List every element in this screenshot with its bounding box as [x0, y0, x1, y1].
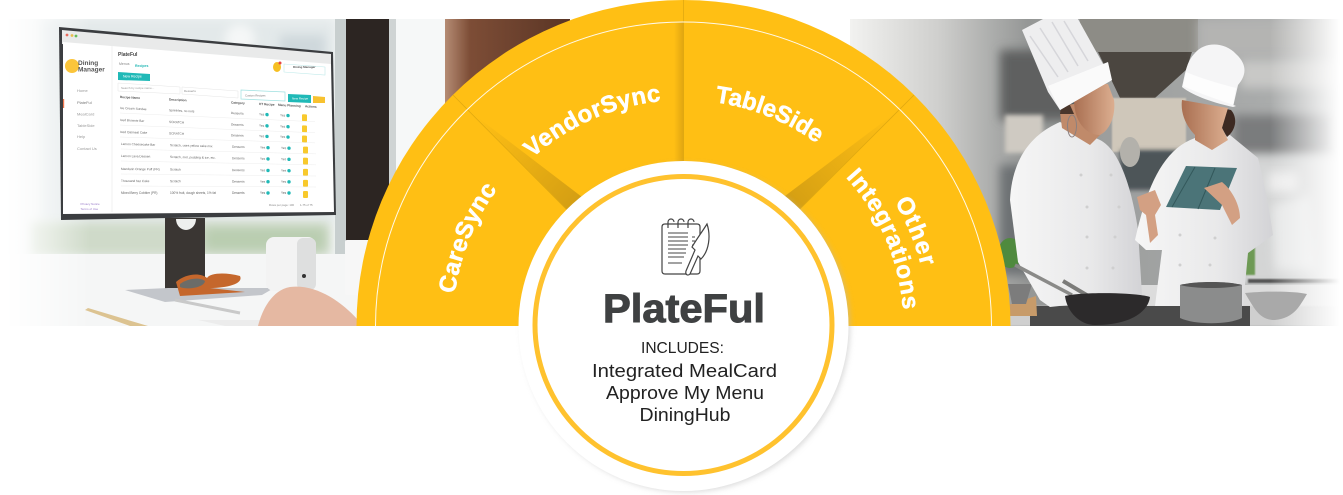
includes list: Approve My Menu [606, 383, 764, 403]
screen: sidebar menu: PlateFul [77, 100, 92, 105]
divider shadows [453, 0, 914, 210]
fan labels: Other [898, 197, 934, 264]
pans and pots [1015, 265, 1307, 325]
photo: chefs in a commercial kitchen [850, 19, 1343, 326]
screen: recipe table: SCRATCH [169, 120, 185, 125]
fan labels: TableSide [717, 86, 822, 142]
screen: recipe table: 1-75 of 75 [300, 203, 313, 207]
chef left [1010, 19, 1142, 307]
icon: notepad and chef knife [662, 219, 709, 275]
screen: recipe table: SCRATCH [169, 131, 185, 136]
screen: page header and buttons: PlateFul [118, 52, 138, 58]
chef right [1135, 44, 1273, 306]
includes list: INCLUDES: [641, 340, 724, 357]
desk items: glasses, device, keyboard, hand [175, 237, 358, 326]
screen: recipe table: Desserts [231, 111, 244, 116]
includes list: Integrated MealCard [592, 361, 777, 381]
screen: recipe table: Mixed Berry Cobbler (PR) [121, 191, 158, 195]
screen: dining manager logo: Dining [78, 60, 98, 67]
fan labels: VendorSync [521, 88, 660, 154]
screen: page header and buttons: Search by recipe name... [121, 86, 155, 90]
screen: recipe table: Thousand Nut Cake [121, 179, 150, 183]
screen: recipe table: Iced Oatmeal Cake [120, 130, 148, 135]
includes list [592, 340, 777, 425]
screen: recipe table: Desserts [232, 180, 245, 184]
screen: recipe table: Yes [281, 146, 287, 150]
heading: PlateFul [603, 287, 765, 331]
screen: recipe table: Yes [259, 124, 265, 128]
screen: recipe table: Yes [260, 145, 266, 150]
screen: recipe table: Yes [260, 180, 266, 184]
screen: recipe table: Iced Brownie Bar [120, 118, 145, 123]
photo: office desk with monitor [30, 19, 389, 326]
screen: recipe table: Scratch, mol. pudding & ice, etc. [170, 155, 216, 160]
screen: recipe table: Actions [305, 104, 317, 109]
screen: recipe table: Yes [280, 124, 286, 129]
screen: recipe table: Yes [260, 191, 266, 195]
screen: recipe table: Yes [281, 157, 287, 161]
screen: recipe table: Yes [281, 191, 287, 195]
screen: recipe table: Yes [281, 169, 287, 173]
screen: page header and buttons: Desserts [184, 89, 196, 93]
screen: sidebar menu: TableSide [77, 123, 95, 128]
screen: recipe table: Desserts [232, 156, 245, 160]
screen: recipe table: Scratch, uses yellow cake mix [170, 143, 213, 148]
screen: recipe table: Yes [260, 157, 266, 161]
screen: recipe table: Desserts [232, 191, 245, 195]
screen: page header and buttons: Menus [119, 62, 130, 66]
screen: recipe table: Yes [280, 113, 286, 117]
screen: recipe table: 100% fruit, dough sheets, 1% fat [170, 191, 216, 195]
yellow fan [356, 0, 1010, 326]
screen: recipe table: Yes [259, 134, 265, 138]
screen: recipe table: Menu Planning [278, 103, 301, 108]
screen: recipe table: Rows per page: 100 [269, 203, 294, 207]
plant and board on the counter [998, 238, 1037, 316]
screen: recipe table: Desserts [232, 168, 245, 172]
screen: recipe table: Yes [280, 135, 286, 139]
screen: sidebar menu: Privacy Notice [80, 202, 100, 206]
screen: recipe table: Mandarin Orange Puff (PR) [121, 167, 160, 171]
screen: dining manager logo [65, 59, 105, 74]
screen: recipe table: Sprinkles, no nuts [169, 108, 195, 113]
screen: recipe table: Lemon Cheesecake Bar [121, 142, 156, 147]
screen: page header and buttons: New Recipe [292, 96, 309, 100]
screen: recipe table: Desserts [231, 122, 244, 127]
screen: sidebar menu: Home [77, 88, 88, 93]
fan labels [439, 86, 934, 309]
screen: page header and buttons: Recipes [135, 64, 148, 68]
screen: page header and buttons [118, 52, 325, 103]
screen: recipe table: Description [169, 97, 187, 102]
screen: recipe table: Scratch [170, 179, 181, 183]
screen: recipe table: Recipe Name [120, 95, 140, 100]
screen: recipe table: Scratch [170, 167, 181, 172]
screen: recipe table: Desserts [232, 145, 245, 149]
screen: recipe table: Category [231, 101, 245, 105]
screen: page header and buttons: Custom Recipes [245, 94, 266, 98]
thin white arc [376, 22, 992, 326]
screen: sidebar menu: MealCard [77, 112, 94, 116]
window and hair behind the fan [389, 19, 570, 259]
screen: recipe table: Yes [281, 180, 287, 184]
screen: sidebar menu: Help [77, 134, 86, 139]
screen: page header and buttons: Dining Manager [293, 65, 316, 69]
monitor [59, 27, 336, 302]
screen: recipe table: Ice Cream Sundae [120, 106, 147, 111]
screen: page header and buttons: New Recipe [123, 74, 142, 78]
screen: recipe table: Yes [259, 112, 265, 117]
screen: sidebar menu [77, 88, 100, 211]
screen: recipe table: Lemon Lava Dessert [121, 154, 151, 159]
screen: recipe table [120, 95, 317, 207]
screen: recipe table: HT Recipe [259, 102, 275, 107]
screen: recipe table: Desserts [231, 133, 244, 138]
includes list: DiningHub [640, 405, 730, 425]
screen: dining manager logo: Manager [78, 66, 105, 74]
fan labels: CareSync [439, 184, 496, 292]
screen: recipe table: Yes [260, 168, 266, 172]
fan labels: Integrations [846, 167, 916, 309]
center circle [518, 161, 850, 492]
screen: sidebar menu: Contact Us [77, 146, 97, 151]
screen: sidebar menu: Terms of Use [80, 207, 99, 211]
